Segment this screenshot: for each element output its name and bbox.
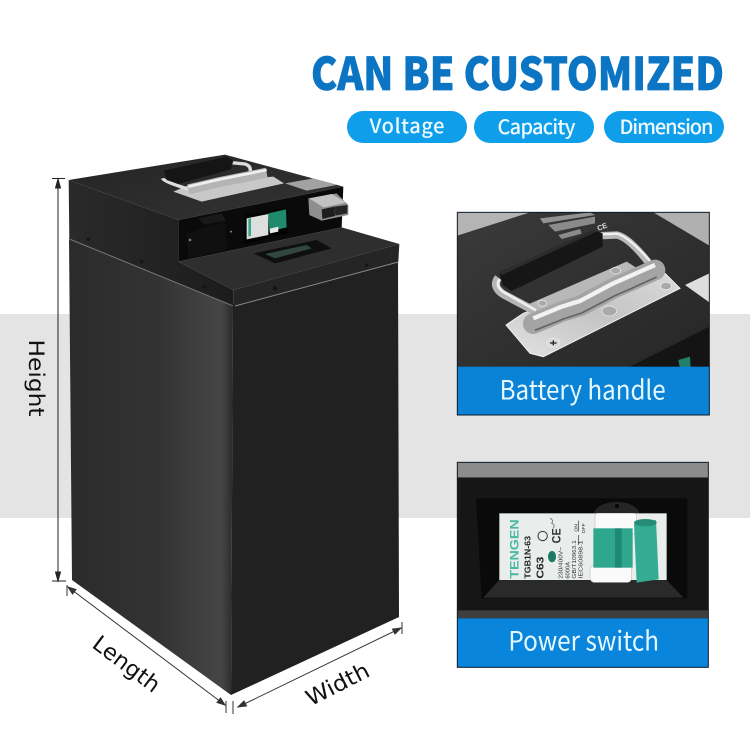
grey background band	[0, 314, 750, 518]
handle photo surface	[457, 212, 709, 369]
steel bar	[496, 278, 537, 312]
battery body: left face	[69, 238, 233, 695]
battery lid and controls	[69, 155, 399, 306]
pill: dimension: Dimension	[620, 111, 714, 140]
screws	[538, 267, 671, 347]
handle plate	[506, 265, 680, 357]
label sticker	[285, 178, 337, 191]
dome	[594, 502, 639, 514]
width line	[238, 622, 402, 707]
lid screws	[87, 238, 368, 290]
breaker markings: IEC60898-1	[579, 540, 585, 579]
caption bar	[457, 618, 708, 667]
breaker markings: 6000A	[565, 562, 571, 579]
frame	[457, 477, 708, 619]
handle photo details	[496, 212, 680, 357]
lid right face	[233, 244, 399, 306]
hinge backing	[530, 262, 636, 310]
label: width: Width	[302, 659, 374, 712]
steel bar	[163, 163, 250, 191]
caption bar: Power switch	[508, 620, 659, 659]
breaker markings: ON	[573, 524, 579, 532]
port cover	[198, 213, 226, 225]
pill: capacity: Capacity	[498, 111, 576, 140]
breaker body	[499, 513, 667, 580]
label: height: Height	[24, 340, 48, 416]
pill: capacity	[474, 111, 594, 143]
green switch hint	[678, 357, 691, 368]
hinge	[188, 173, 267, 189]
toggle switch	[590, 513, 659, 583]
panel: power switch	[457, 462, 708, 667]
photo background corners	[457, 212, 709, 368]
breaker markings: 230/400V~	[559, 546, 565, 579]
breaker markings: GB/T10963.1	[572, 540, 578, 579]
pill: voltage: Voltage	[368, 110, 444, 139]
grip	[164, 157, 233, 184]
length line	[67, 585, 233, 714]
display	[253, 240, 332, 263]
top strip	[457, 462, 708, 477]
control panel	[178, 187, 343, 262]
breaker markings: OFF	[581, 523, 587, 533]
breaker markings: CE	[550, 528, 564, 543]
printed instructions	[540, 212, 595, 239]
battery body: right face	[231, 260, 399, 695]
breaker markings	[507, 518, 587, 579]
label: length: Length	[87, 631, 165, 698]
recess	[476, 498, 687, 598]
caption bar: Battery handle	[500, 369, 666, 408]
panel: battery handle	[457, 212, 709, 415]
lower shelf	[178, 227, 399, 290]
lid left face	[69, 180, 233, 306]
lid top face	[69, 155, 343, 220]
anderson connector	[308, 193, 348, 221]
pill: voltage	[347, 110, 467, 143]
caption bar	[457, 367, 709, 415]
option pills	[347, 110, 724, 143]
handle plate	[173, 177, 284, 202]
breaker markings: TGB1N-63	[523, 536, 533, 579]
side block	[187, 222, 227, 258]
steel barrel	[533, 270, 655, 324]
battery illustration	[24, 155, 402, 714]
rubber grip	[499, 230, 603, 291]
height line	[52, 178, 66, 581]
certification marks: CE	[596, 221, 609, 233]
controls, drawn at finer coordinates	[163, 157, 348, 263]
breaker, drawn at finer coordinates	[499, 502, 667, 583]
breaker markings: TENGEN	[507, 519, 521, 579]
breaker	[244, 207, 287, 244]
sticker	[685, 273, 709, 302]
breaker markings: C63	[535, 556, 546, 579]
